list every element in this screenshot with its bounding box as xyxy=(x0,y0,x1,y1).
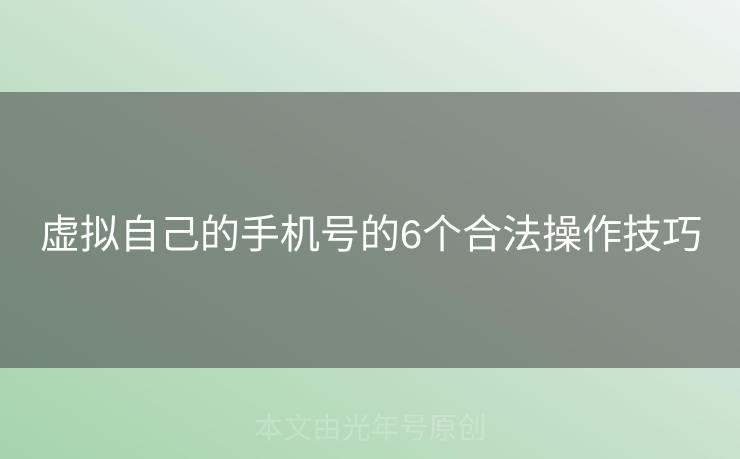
dark translucent band xyxy=(0,92,740,368)
footer watermark text: 本文由光年号原创 xyxy=(254,413,486,445)
title: 虚拟自己的手机号的6个合法操作技巧 xyxy=(40,213,702,257)
